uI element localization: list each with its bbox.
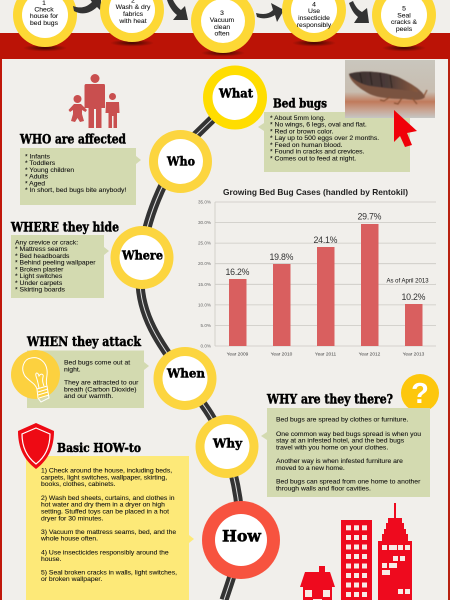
- header steps: [13, 0, 436, 56]
- step 5: [372, 0, 436, 52]
- panel: where: * Skirting boards: [15, 286, 65, 294]
- step 1: Check: [34, 6, 54, 14]
- panel: where: * Behind peeling wallpaper: [15, 260, 96, 266]
- panel: who: * Young children: [25, 167, 74, 174]
- panel: how-to: 3) Vacuum the mattress seams, bed, and the: [41, 529, 176, 536]
- node: how: [202, 501, 280, 579]
- chart: growing bed bug cases: 0.0%: [201, 344, 211, 348]
- step 4: [282, 0, 346, 46]
- panel: how-to: dryer for 30 minutes.: [41, 515, 103, 522]
- panel: who: * In short, bed bugs bite anybody!: [25, 187, 126, 194]
- panel: what: * No wings, 6 legs, oval and flat.: [270, 122, 367, 129]
- step 2: with heat: [118, 18, 147, 25]
- step 4: responsibly: [297, 22, 332, 29]
- icon: red cursor: [394, 110, 417, 147]
- panel: why: stay at an infested hotel, and the bed bugs: [276, 438, 405, 445]
- step 5: 5: [402, 6, 406, 12]
- panel: why: [261, 408, 430, 497]
- panel: what: * About 5mm long.: [270, 115, 326, 122]
- panel: what: * Comes out to feed at night.: [270, 156, 356, 162]
- panel: where: * Mattress seams: [15, 246, 68, 253]
- chart: growing bed bug cases: 24.1%: [314, 235, 338, 245]
- step 3: [191, 0, 255, 56]
- panel: when: They are attracted to our: [64, 380, 139, 386]
- panel: where: * Under carpets: [15, 280, 63, 287]
- icon: question mark: ?: [411, 378, 429, 410]
- panel: why: Another way is when infested furniture are: [276, 458, 403, 465]
- panel: how-to: 1) Check around the house, including beds,: [41, 468, 172, 475]
- panel: what: [258, 112, 410, 172]
- panel: when: Bed bugs come out at: [64, 360, 130, 366]
- chart: growing bed bug cases: 25.0%: [198, 241, 211, 246]
- heading: what: Bed bugs: [273, 96, 327, 110]
- chart: growing bed bug cases: Year 2009: [227, 352, 249, 358]
- step 5: peels: [396, 26, 413, 33]
- chart: growing bed bug cases: Growing Bed Bug Cases (handled by Rentokil): [223, 187, 408, 197]
- chart: growing bed bug cases: 15.0%: [198, 282, 211, 287]
- office tower: [341, 520, 372, 600]
- panel: why: travel with you home on your clothes.: [276, 444, 388, 452]
- heading: when: WHEN they attack: [26, 335, 142, 350]
- header red band: [0, 33, 450, 59]
- panel: what: * Red or brown color.: [270, 128, 334, 136]
- step 4: 4: [312, 2, 316, 8]
- step 5: cracks &: [391, 19, 417, 26]
- panel: what: * Lay up to 500 eggs over 2 months.: [270, 135, 379, 142]
- icon: buildings: [300, 503, 412, 600]
- panel: when: night.: [64, 366, 81, 374]
- panel: how-to: 4) Use insecticides responsibly around the: [41, 550, 169, 556]
- panel: where: Any crevice or crack:: [15, 239, 78, 246]
- step 2: [100, 0, 164, 46]
- chart: growing bed bug cases: Year 2010: [271, 352, 293, 358]
- panel: how-to: or broken wallpaper.: [41, 576, 102, 583]
- heading: where: WHERE they hide: [10, 220, 119, 236]
- chart: growing bed bug cases: As of April 2013: [386, 278, 429, 284]
- node: where: Where: [121, 248, 163, 262]
- node: where: [110, 226, 174, 289]
- panel: when: breath (Carbon Dioxide): [64, 386, 137, 393]
- panel: how-to: setting. Stuffed toys can be placed in a hot: [41, 508, 169, 516]
- chart: growing bed bug cases: 30.0%: [198, 220, 211, 225]
- panel: what: * Feed on human blood.: [270, 142, 343, 149]
- step 4: Use: [308, 8, 320, 15]
- panel: how-to: carpets, light switches, wallpaper, skirting,: [41, 474, 167, 482]
- arrow 3: [256, 3, 284, 22]
- panel: why: Bed bugs are spread by clothes or furniture.: [276, 417, 408, 424]
- step 5: Seal: [397, 12, 411, 20]
- icon: question mark: [401, 374, 439, 412]
- icon: family: [68, 74, 120, 128]
- panel: where: * Light switches: [15, 273, 63, 280]
- icon: light bulb: [11, 350, 60, 402]
- step 3: 3: [220, 10, 224, 17]
- panel: who: [20, 148, 141, 205]
- panel: where: * Broken plaster: [15, 266, 64, 273]
- panel: how-to: whole house often.: [40, 536, 98, 543]
- panel: when: [27, 350, 149, 408]
- chart: growing bed bug cases: 35.0%: [198, 200, 211, 204]
- chart: growing bed bug cases: Year 2011: [315, 352, 336, 358]
- step 4: insecticide: [298, 15, 330, 22]
- panel: who: * Infants: [25, 154, 51, 160]
- node: who: [149, 130, 212, 193]
- node: when: When: [166, 366, 205, 380]
- panel: who: * Toddlers: [25, 160, 56, 167]
- chart: growing bed bug cases: 10.2%: [402, 292, 426, 302]
- chart: growing bed bug cases: 29.7%: [358, 212, 382, 222]
- node: when: [154, 347, 216, 410]
- step 1: [13, 0, 77, 52]
- panel: why: moved to a new home.: [276, 465, 345, 472]
- step 1: bed bugs: [30, 20, 59, 27]
- panel: how-to: books, clothes, cabinets.: [41, 481, 116, 488]
- chart: growing bed bug cases: Year 2013: [403, 352, 425, 358]
- photo: bed bug: [345, 60, 435, 118]
- skyscraper: [378, 503, 412, 600]
- arrow 4: [349, 1, 369, 23]
- step 1: 1: [42, 0, 46, 7]
- panel: why: One common way bed bugs spread is when you: [276, 431, 421, 438]
- chart: growing bed bug cases: Year 2012: [359, 352, 381, 358]
- arrow 1: [73, 0, 101, 13]
- chart: growing bed bug cases: 16.2%: [226, 267, 250, 277]
- step 2: Wash & dry: [116, 4, 151, 11]
- panel: how-to: hot water and dry them in a dryer on high: [41, 502, 165, 509]
- panel: why: Bed bugs can spread from one home to another: [276, 478, 421, 486]
- panel: how-to: house.: [41, 556, 62, 563]
- arrow 2: [167, 0, 188, 20]
- panel: why: through walls and floor cavities.: [276, 486, 371, 492]
- chart: growing bed bug cases: [198, 187, 436, 358]
- node: what: What: [218, 86, 253, 100]
- panel: who: * Aged: [25, 180, 45, 187]
- step 3: often: [214, 30, 230, 38]
- heading: how-to: Basic HOW-to: [57, 440, 141, 455]
- step 1: house for: [30, 13, 59, 20]
- panel: when: and our warmth.: [64, 393, 113, 400]
- step 2: fabrics: [123, 11, 144, 18]
- panel: where: [11, 235, 109, 298]
- panel: who: * Adults: [25, 174, 49, 181]
- panel: how-to: [26, 456, 194, 600]
- chart: growing bed bug cases: 5.0%: [201, 323, 211, 328]
- heading: why: WHY are they there?: [266, 392, 393, 408]
- node: how: How: [222, 526, 262, 546]
- heading: who: WHO are affected: [19, 132, 126, 148]
- node: who: Who: [166, 154, 195, 168]
- node: what: [203, 66, 267, 130]
- road timeline: [140, 97, 241, 600]
- chart: growing bed bug cases: 10.0%: [198, 302, 211, 307]
- step 3: Vacuum: [210, 17, 235, 24]
- chart: growing bed bug cases: 20.0%: [198, 261, 211, 266]
- node: why: [196, 415, 258, 478]
- panel: how-to: 2) Wash bed sheets, curtains, and clothes in: [41, 495, 175, 502]
- panel: what: * Found in cracks and crevices.: [270, 149, 365, 156]
- house: [300, 566, 335, 600]
- chart: growing bed bug cases: 19.8%: [270, 252, 294, 262]
- panel: how-to: 5) Seal broken cracks in walls, light switches,: [41, 570, 177, 576]
- panel: where: * Bed headboards: [15, 253, 70, 260]
- node: why: Why: [212, 436, 243, 450]
- icon: shield: [18, 423, 54, 469]
- step 3: clean: [214, 24, 230, 31]
